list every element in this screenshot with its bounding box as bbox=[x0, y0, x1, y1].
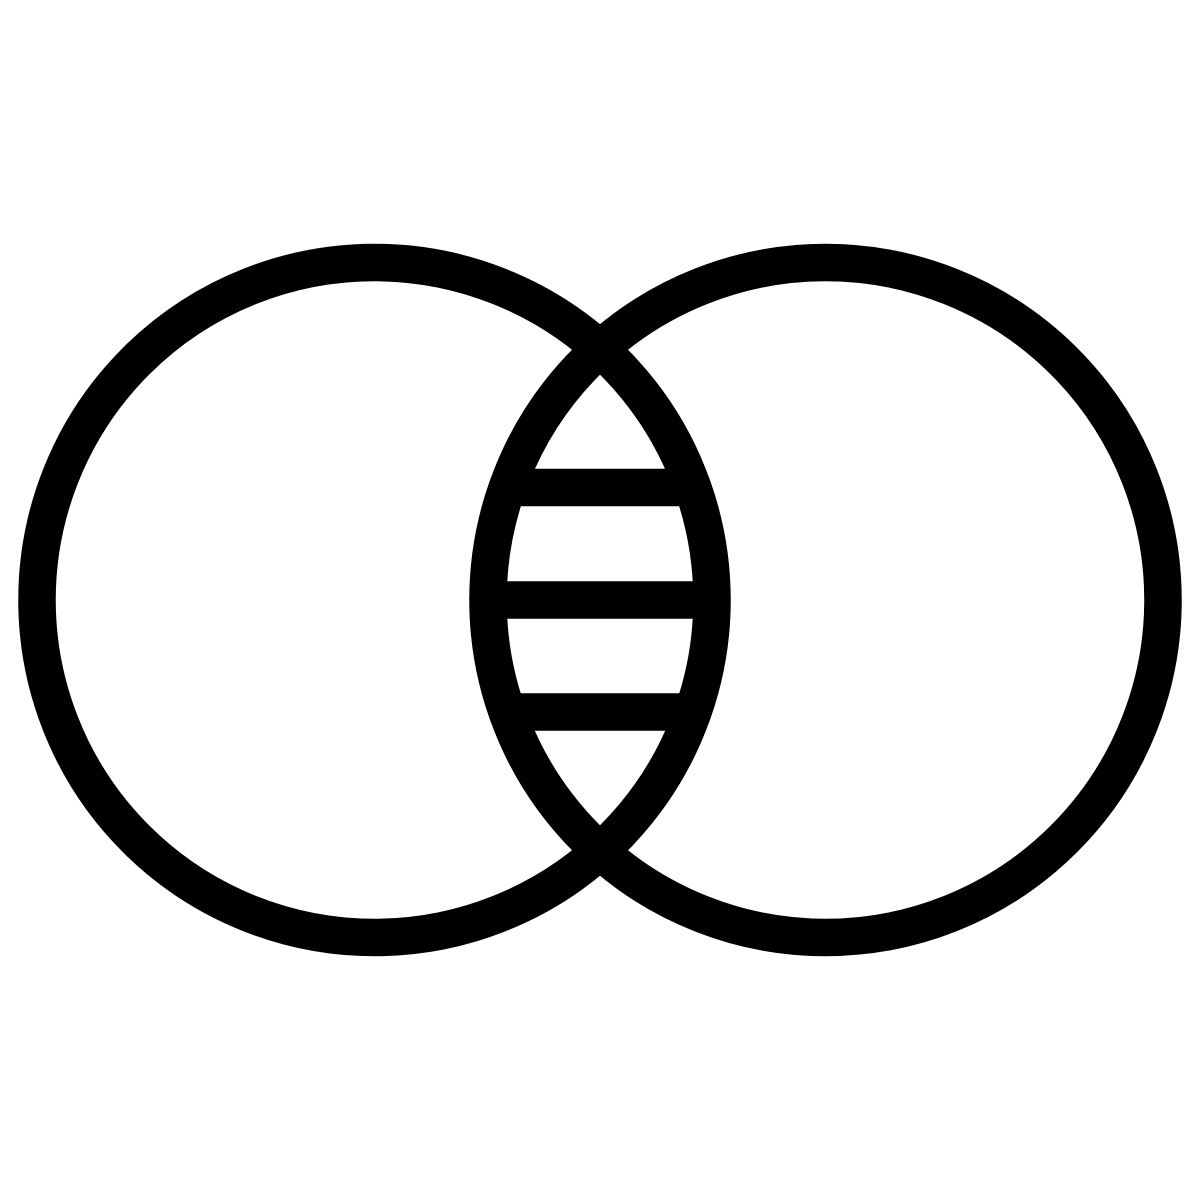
intersection stripes bbox=[488, 488, 712, 712]
left circle bbox=[37, 262, 712, 938]
right circle bbox=[488, 262, 1163, 938]
